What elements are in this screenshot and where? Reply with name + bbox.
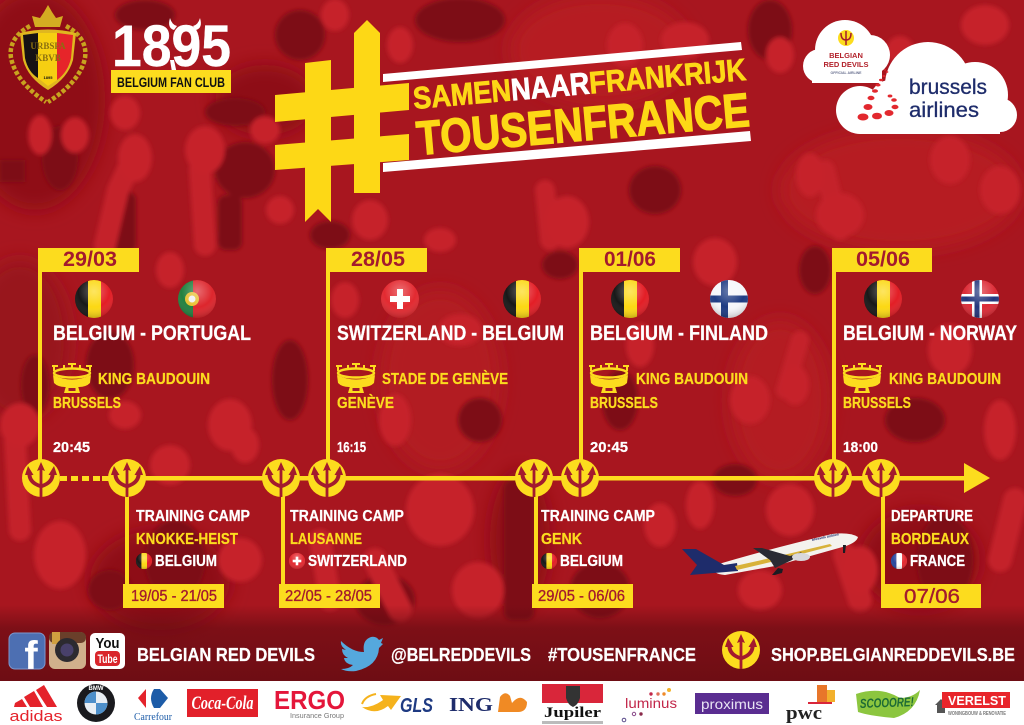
- shield: 1895: [44, 75, 53, 80]
- match: Belgium - Portugal: 20:45: [53, 439, 90, 456]
- training camp: Genk: BELGIUM: [560, 553, 623, 570]
- sponsor strip: [0, 681, 1024, 725]
- match: Belgium - Portugal: [38, 248, 251, 462]
- timeline trident markers: [22, 459, 900, 497]
- logo: 1895 Belgium fan club: 1895: [112, 14, 231, 79]
- training camp: Genk: [532, 495, 655, 608]
- title: samen naar frankrijk: SAMENNAARFRANKRIJK: [412, 52, 748, 116]
- sponsor: adidas: adidas: [10, 708, 62, 725]
- shield: URBSFA: [30, 41, 66, 51]
- flag: Belgium: [864, 280, 902, 318]
- match: Belgium - Finland: BELGIUM - FINLAND: [590, 322, 768, 345]
- match: Switzerland - Belgium: 16:15: [337, 439, 366, 456]
- crest: URBSFA KBVB: [11, 5, 85, 102]
- match: Switzerland - Belgium: STADE DE GENÈVE: [382, 369, 508, 388]
- match: Belgium - Portugal: KING BAUDOUIN: [98, 371, 210, 388]
- departure: Bordeaux: DEPARTURE: [891, 508, 973, 525]
- airplane: [682, 532, 858, 575]
- departure: Bordeaux: 07/06: [904, 586, 960, 608]
- icon: stadium: [52, 364, 92, 393]
- social: Facebook icon: [9, 633, 45, 678]
- sponsor: ING: [449, 693, 527, 716]
- match: Switzerland - Belgium: [326, 248, 564, 462]
- flag: Portugal: [178, 280, 216, 318]
- sponsor: adidas: [10, 685, 62, 725]
- departure: Bordeaux: [881, 495, 981, 608]
- social: twitter handle: @BELREDDEVILS: [391, 645, 531, 665]
- social: Instagram icon: [49, 632, 86, 669]
- title banner: [383, 42, 752, 172]
- sponsor: BMW: BMW: [88, 686, 104, 692]
- sponsor: Scooore: [856, 690, 920, 718]
- icon: stadium: [842, 364, 882, 393]
- flag: Belgium: [136, 553, 152, 569]
- sponsor: GLS: GLS: [400, 695, 434, 717]
- flag: Norway: [961, 280, 999, 318]
- sponsor: GLS: [362, 694, 434, 717]
- icon: shop trident: [722, 631, 760, 669]
- shield: KBVB: [35, 53, 61, 63]
- cloud: official airline: RED DEVILS: [823, 60, 869, 69]
- laurel wreath: [11, 26, 85, 102]
- sponsor: ING: ING: [449, 694, 494, 716]
- match: Belgium - Norway: [832, 248, 1017, 462]
- cloud: brussels airlines: [836, 42, 1017, 134]
- match: Belgium - Norway: BRUSSELS: [843, 395, 911, 412]
- sponsor: Proximus: proximus: [701, 696, 763, 712]
- icon: twitter bird: [341, 637, 383, 671]
- training camp: Genk: 29/05 - 06/06: [538, 588, 625, 605]
- sponsor: ERGO: Insurance Group: [290, 711, 344, 720]
- sponsor: Verelst: [935, 692, 1010, 717]
- training camp: Knokke-Heist: TRAINING CAMP: [136, 508, 250, 525]
- flag: Switzerland: [289, 553, 305, 569]
- training camp: Knokke-Heist: BELGIUM: [155, 553, 217, 570]
- match: Belgium - Portugal: BRUSSELS: [53, 395, 121, 412]
- cloud: brussels airlines: brussels: [909, 76, 987, 99]
- departure: Bordeaux: BORDEAUX: [891, 531, 969, 548]
- match: Belgium - Finland: 20:45: [590, 439, 628, 456]
- shield: [20, 30, 76, 90]
- flag: Finland: [710, 280, 748, 318]
- title hashtag symbol: [275, 20, 409, 222]
- sponsor clouds: [803, 20, 1017, 134]
- training camp: Lausanne: 22/05 - 28/05: [285, 588, 372, 605]
- training camp: Lausanne: TRAINING CAMP: [290, 508, 404, 525]
- match: Switzerland - Belgium: 28/05: [351, 248, 405, 271]
- sponsor: Coca-Cola: Coca-Cola: [192, 693, 254, 714]
- match: Belgium - Finland: [579, 248, 768, 462]
- cloud: brussels airlines: airlines: [909, 99, 979, 122]
- flag: Belgium: [75, 280, 113, 318]
- flag: France: [891, 553, 907, 569]
- sponsor: Jupiler: Jupiler: [544, 705, 601, 721]
- social: YouTube icon: You: [96, 635, 120, 652]
- training camp: Knokke-Heist: 19/05 - 21/05: [131, 588, 217, 605]
- sponsor: Carrefour: [134, 689, 173, 723]
- training camp: Lausanne: LAUSANNE: [290, 531, 362, 548]
- airplane: brussels airlines: [811, 532, 839, 542]
- match: Belgium - Norway: 18:00: [843, 439, 878, 456]
- cloud: official airline: [803, 20, 890, 83]
- departure: Bordeaux: FRANCE: [910, 553, 965, 570]
- title: tousenfrance: TOUSENFRANCE: [414, 84, 752, 166]
- logo: 1895 Belgium fan club: BELGIUM FAN CLUB: [117, 75, 225, 90]
- flag: Belgium: [611, 280, 649, 318]
- icon: stadium: [589, 364, 629, 393]
- training camp: Lausanne: SWITZERLAND: [308, 553, 407, 570]
- sponsor: luminus: [622, 688, 677, 722]
- training camp: Knokke-Heist: KNOKKE-HEIST: [136, 531, 238, 548]
- timeline axis: [60, 463, 990, 493]
- social: YouTube icon: Tube: [98, 652, 118, 666]
- match: Belgium - Norway: KING BAUDOUIN: [889, 371, 1001, 388]
- match: Belgium - Finland: BRUSSELS: [590, 395, 658, 412]
- cloud: official airline: BELGIAN: [829, 51, 863, 60]
- match: Belgium - Portugal: 29/03: [63, 248, 117, 271]
- sponsor: BMW: [77, 684, 115, 722]
- social: Belgian Red Devils: BELGIAN RED DEVILS: [137, 645, 315, 665]
- sponsor: Jupiler: [542, 684, 603, 724]
- social: Facebook icon: f: [24, 634, 38, 678]
- sponsor: PwC: [786, 685, 835, 724]
- sponsor: PwC: pwc: [786, 703, 822, 724]
- icon: stadium: [336, 364, 376, 393]
- sponsor: Verelst: VERELST: [948, 693, 1006, 708]
- sponsor: ERGO: ERGO: [274, 685, 345, 715]
- match: Belgium - Finland: KING BAUDOUIN: [636, 371, 748, 388]
- sponsor: luminus: luminus: [625, 695, 677, 711]
- flag: Belgium: [541, 553, 557, 569]
- social: hashtag: #TOUSENFRANCE: [548, 645, 696, 665]
- crown: [32, 5, 63, 27]
- bright arms and hands: [15, 160, 1015, 610]
- sponsor: Verelst: WONINGBOUW & RENOVATIE: [948, 711, 1007, 717]
- sponsor: Coca-Cola: [187, 689, 258, 717]
- social: YouTube icon: [90, 633, 125, 669]
- training camp: Lausanne: [279, 495, 407, 608]
- match: Belgium - Portugal: BELGIUM - PORTUGAL: [53, 322, 251, 345]
- sponsor: Proximus: [695, 693, 769, 714]
- training camp: Genk: GENK: [541, 531, 582, 548]
- cloud: official airline: OFFICIAL AIRLINE: [831, 71, 862, 75]
- match: Switzerland - Belgium: GENÈVE: [337, 393, 394, 412]
- match: Switzerland - Belgium: SWITZERLAND - BELGIUM: [337, 322, 564, 345]
- devil horns and tail: [169, 18, 201, 74]
- match: Belgium - Norway: 05/06: [856, 248, 910, 271]
- sponsor: Carrefour: Carrefour: [134, 712, 173, 723]
- flag: Belgium: [503, 280, 541, 318]
- training camp: Knokke-Heist: [123, 495, 250, 608]
- match: Belgium - Finland: 01/06: [604, 248, 656, 271]
- training camp: Genk: TRAINING CAMP: [541, 508, 655, 525]
- sponsor: Scooore: SCOOORE!: [860, 694, 915, 711]
- flag: Switzerland: [381, 280, 419, 318]
